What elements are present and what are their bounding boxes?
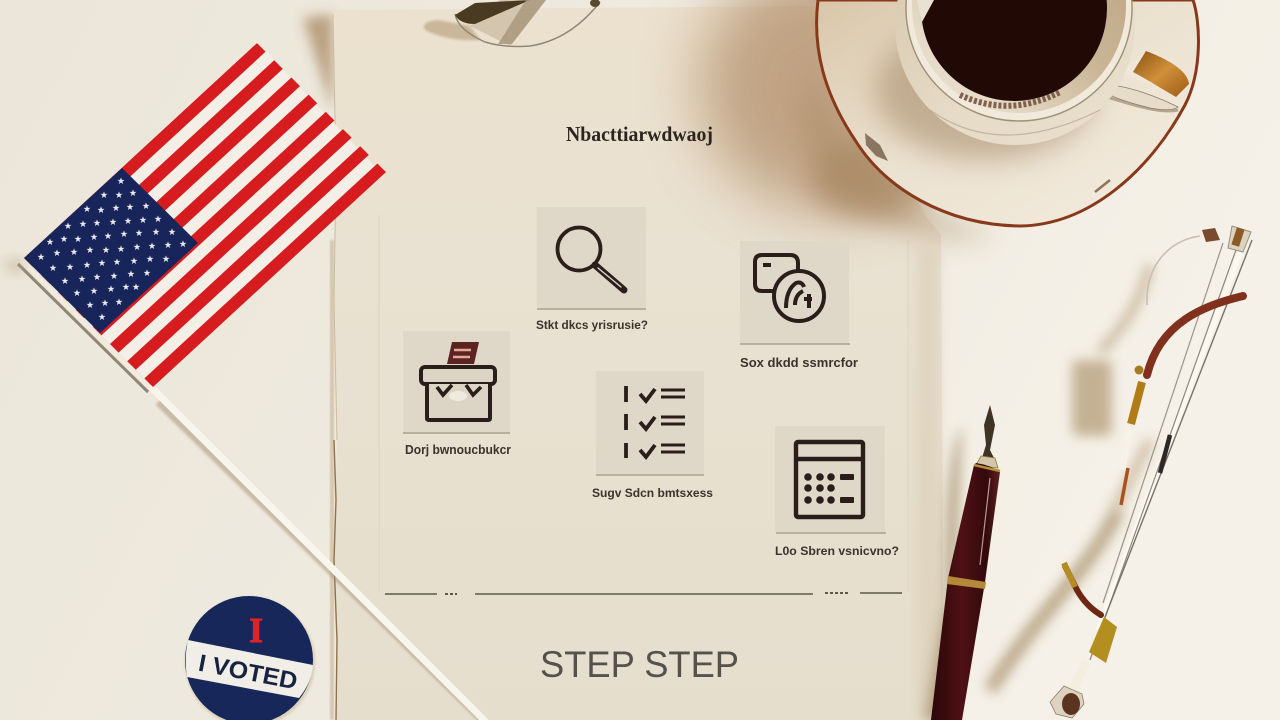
badge band xyxy=(186,640,313,698)
saucer xyxy=(817,0,1198,226)
I voted badge xyxy=(185,596,315,720)
white field xyxy=(24,42,383,387)
pen gold ring xyxy=(947,576,986,589)
cup body xyxy=(895,0,1135,145)
tile xyxy=(537,207,646,309)
icon: checklist xyxy=(626,386,685,458)
flag pole xyxy=(18,260,490,720)
badge disc xyxy=(185,596,313,720)
hinge xyxy=(1202,228,1220,242)
saucer chips xyxy=(865,133,888,161)
cup shadow xyxy=(875,20,1095,160)
icon: calculator xyxy=(796,442,863,517)
temple arm upper xyxy=(1147,296,1243,375)
paper shadow on table xyxy=(303,14,334,720)
paper right edge shading xyxy=(916,250,940,720)
pen nib xyxy=(982,405,995,458)
dark band xyxy=(1160,435,1170,473)
paper sheet xyxy=(333,0,950,720)
pen shadow xyxy=(925,425,962,720)
label: Stkt dkcs yrisrusie? xyxy=(536,320,648,332)
panel: checklist step xyxy=(592,371,713,500)
badge text: I VOTED xyxy=(196,650,300,695)
cup handle xyxy=(1104,50,1189,111)
tile xyxy=(403,331,510,433)
icon: id card with hand xyxy=(755,255,824,321)
flag shadow xyxy=(0,258,24,275)
coffee xyxy=(921,0,1107,101)
inner frame xyxy=(379,215,908,592)
stars xyxy=(38,177,186,320)
torn left edge xyxy=(334,440,337,720)
footer rule xyxy=(385,593,902,594)
cup inner wall xyxy=(912,0,1126,113)
panel: search step xyxy=(536,207,648,332)
icon: ballot box xyxy=(421,342,495,420)
pen collar xyxy=(976,456,998,468)
badge shadow xyxy=(185,597,315,720)
tip xyxy=(1072,662,1086,692)
title: Nbacttiarwdwaoj xyxy=(566,122,713,146)
panel: calculator step xyxy=(775,426,899,558)
clear temple highlight xyxy=(1098,238,1246,630)
footer heading: STEP STEP xyxy=(540,644,739,685)
blue canton xyxy=(24,168,198,333)
label: Dorj bwnoucbukcr xyxy=(405,443,511,457)
arm gold sleeve xyxy=(1131,382,1142,424)
american flag xyxy=(0,42,386,387)
panel: card and hand step xyxy=(740,241,858,370)
pen body xyxy=(931,463,1000,720)
saucer shadow xyxy=(800,60,1000,239)
coffee shadow on paper xyxy=(700,0,950,218)
label: Sugv Sdcn bmtsxess xyxy=(592,486,713,500)
red stripes xyxy=(24,43,386,387)
fountain pen xyxy=(925,405,1000,720)
lower arm xyxy=(1065,566,1101,615)
arm clear section xyxy=(1122,428,1130,470)
label: L0o Sbren vsnicvno? xyxy=(775,544,899,558)
badge red I: I xyxy=(249,611,263,650)
reading glasses at top of paper xyxy=(424,0,600,46)
folded glasses xyxy=(1050,226,1252,718)
panel: ballot box step xyxy=(403,331,511,457)
tile xyxy=(740,241,849,344)
icon: magnifying glass xyxy=(558,228,624,290)
gold band xyxy=(1089,617,1117,663)
label: Sox dkdd ssmrcfor xyxy=(740,356,858,370)
tile xyxy=(596,371,704,474)
tile xyxy=(775,426,885,532)
glasses shadow xyxy=(990,265,1150,690)
lens arc xyxy=(1147,236,1200,305)
cup rim xyxy=(906,0,1132,121)
coffee cup and saucer xyxy=(800,0,1198,239)
glasses frame rods xyxy=(1103,243,1223,603)
